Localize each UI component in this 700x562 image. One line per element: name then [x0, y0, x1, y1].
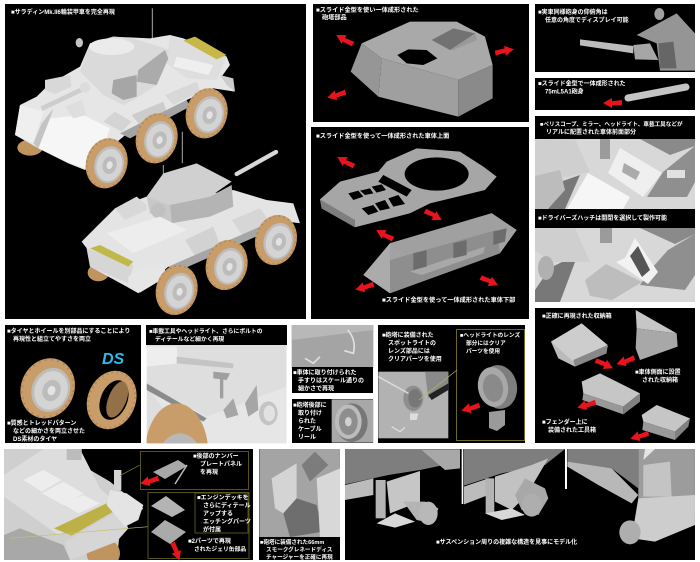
- caption: DS tyre: DS素材のタイヤ: [13, 435, 57, 443]
- illustration: hull lower part: [363, 213, 517, 293]
- caption: suspension: ■サスペンション周りの複雑な構造を見事にモデル化: [436, 538, 577, 546]
- arrow: barrel: [603, 98, 622, 108]
- callout: headlight lens inset: [419, 330, 524, 440]
- caption: DS tyre: などの細かさを両立させた: [13, 427, 85, 435]
- panel: gun elevation: [535, 4, 695, 72]
- caption: spotlight lens: ■砲塔に装備された: [382, 331, 434, 339]
- caption: cable reel: ■砲塔後部に: [293, 401, 327, 409]
- panel: full vehicle views: [5, 4, 306, 320]
- illustration: closed hatch: [535, 139, 695, 209]
- caption: gun elevation: ■実車同様砲身の仰俯角は: [538, 8, 608, 16]
- panel: handrails: [292, 325, 373, 393]
- panel: stowage boxes: [535, 308, 695, 443]
- caption: spotlight lens: クリアパーツを使用: [388, 355, 442, 363]
- illustration: gun and mantlet: [580, 8, 695, 71]
- caption: smoke dischargers: ■砲塔に装備された66mm: [260, 538, 324, 546]
- callout: jerry can and etched parts: されたジェリ缶部品: [194, 545, 246, 553]
- caption: tool boxes: 装備された工具箱: [548, 426, 596, 434]
- illustration: vehicle rear view: [82, 132, 302, 320]
- illustration: hull upper part: [320, 148, 497, 227]
- callout: number plate: [139, 452, 248, 490]
- panel: hull front details: [535, 116, 695, 302]
- caption background: handrails: [292, 367, 373, 393]
- caption: tyres and wheels: ■タイヤとホイールを別部品にすることにより: [7, 327, 130, 335]
- caption: full vehicle: ■サラディンMk.II6輪装甲車を完全再現: [11, 8, 115, 16]
- callout: jerry can and etched parts: エッチングパーツ: [203, 518, 251, 526]
- caption: smoke dischargers: スモークグレネードディス: [266, 546, 333, 554]
- caption: gun elevation: 任意の角度でディスプレイ可能: [545, 16, 629, 24]
- illustration: spotlight close-up: [378, 372, 448, 438]
- illustration: cable reel: [332, 399, 373, 443]
- panel: tools and headlights: ■車載工具やヘッドライト、さらにボルトの: [149, 327, 263, 335]
- caption: cable reel: 取り付け: [298, 409, 322, 417]
- caption background: driver hatch: [535, 209, 695, 228]
- caption: side boxes: ■車体側面に設置: [635, 368, 681, 376]
- callout: jerry can and etched parts: ■2パーツで再現: [188, 538, 231, 545]
- caption: cable reel: ケーブル: [298, 425, 322, 433]
- logo: DS: DS: [102, 351, 125, 368]
- callout: jerry can and etched parts: アップする: [203, 510, 233, 518]
- panel: handrails: 細かさで再現: [298, 384, 334, 392]
- caption: tool boxes: ■フェンダー上に: [542, 418, 588, 426]
- caption: side boxes: された収納箱: [642, 376, 678, 384]
- illustration: suspension view 2: [462, 449, 565, 520]
- callout: number plate: を再現: [200, 468, 218, 476]
- caption background: front details: [535, 116, 695, 140]
- caption: hull upper: ■スライド金型を使って一体成形された車体上面: [316, 132, 449, 140]
- callout: jerry can and etched parts: [148, 492, 251, 562]
- illustration: suspension view 1: [345, 449, 460, 528]
- caption: turret part: ■スライド金型を使い一体成形された: [316, 6, 419, 14]
- illustration: boxes: [551, 310, 690, 440]
- callout: jerry can and etched parts: が付属: [203, 526, 221, 534]
- caption: smoke dischargers: チャージャーを正確に再現: [266, 553, 333, 561]
- illustration: handrails: [292, 325, 373, 368]
- panel: rear deck: [4, 449, 253, 562]
- panel: tyres: [5, 325, 145, 443]
- panel: turret shell: [313, 4, 529, 122]
- caption background: tools: [146, 325, 287, 345]
- panel: handrails: 手すりはスケール通りの: [298, 376, 364, 384]
- arrows: hull parts: [335, 153, 500, 294]
- caption: spotlight lens: レンズ部品には: [388, 347, 430, 355]
- panel: tools and headlights: [146, 325, 287, 444]
- panel: hull upper and lower: [311, 127, 529, 319]
- illustration: open hatch: [535, 228, 695, 302]
- caption: spotlight lens: スポットライトの: [388, 339, 436, 347]
- panel: hull front details: ■ドライバーズハッチは開閉を選択して製作可能: [538, 214, 667, 222]
- panel: gun barrel: [535, 78, 695, 110]
- caption: barrel: ■スライド金型で一体成形された: [538, 80, 626, 88]
- callout: headlight lens inset: ■ヘッドライトのレンズ: [460, 331, 521, 339]
- panel: cable reel: [292, 399, 373, 443]
- caption: tyres and wheels: 再現性と組立てやすさを両立: [13, 335, 91, 343]
- caption: cable reel: られた: [298, 417, 316, 425]
- caption: stowage boxes: ■正確に再現された収納箱: [542, 312, 612, 320]
- caption: cable reel: リール: [298, 435, 316, 441]
- panel: hull front details: ■ペリスコープ、ミラー、ヘッドライト、車載工具などが: [540, 120, 683, 128]
- panel: hull front details: リアルに配置された車体前面部分: [546, 128, 636, 136]
- illustration: suspension view 3: [565, 449, 695, 544]
- caption: DS tyre: ■質感とトレッドパターン: [7, 419, 76, 427]
- callout: jerry can and etched parts: ■エンジンデッキを: [197, 494, 249, 502]
- illustration: tools close-up: [146, 345, 286, 444]
- illustration: wheel and tyre: [13, 353, 145, 437]
- panel: smoke dischargers: [259, 449, 340, 561]
- panel: tools and headlights: ディテールなど細かく再現: [155, 335, 224, 343]
- arrows: turret part: [326, 31, 515, 102]
- callout: jerry can and etched parts: さらにディテール: [203, 502, 251, 510]
- callout: headlight lens inset: パーツを使用: [466, 347, 500, 355]
- illustration: vehicle front view: [15, 8, 235, 193]
- arrows: boxes: [576, 353, 650, 443]
- panel: clear lens parts: [378, 325, 525, 443]
- caption: barrel: 75mL5A1砲身: [545, 88, 584, 96]
- illustration: smoke dischargers: [259, 449, 340, 537]
- panel: suspension: [345, 449, 695, 560]
- illustration: turret part: [351, 22, 493, 117]
- panel: handrails: ■車体に取り付けられた: [293, 368, 357, 376]
- callout: number plate: ■後部のナンバー: [193, 452, 239, 460]
- illustration: rear deck close-up: [4, 449, 148, 562]
- callout: headlight lens inset: 部分にはクリア: [466, 339, 506, 347]
- caption: turret part: 砲塔部品: [322, 14, 347, 22]
- callout: number plate: プレートパネル: [200, 460, 242, 468]
- caption: hull lower: ■スライド金型を使って一体成形された車体下部: [382, 296, 516, 304]
- illustration: barrel part: [628, 87, 686, 98]
